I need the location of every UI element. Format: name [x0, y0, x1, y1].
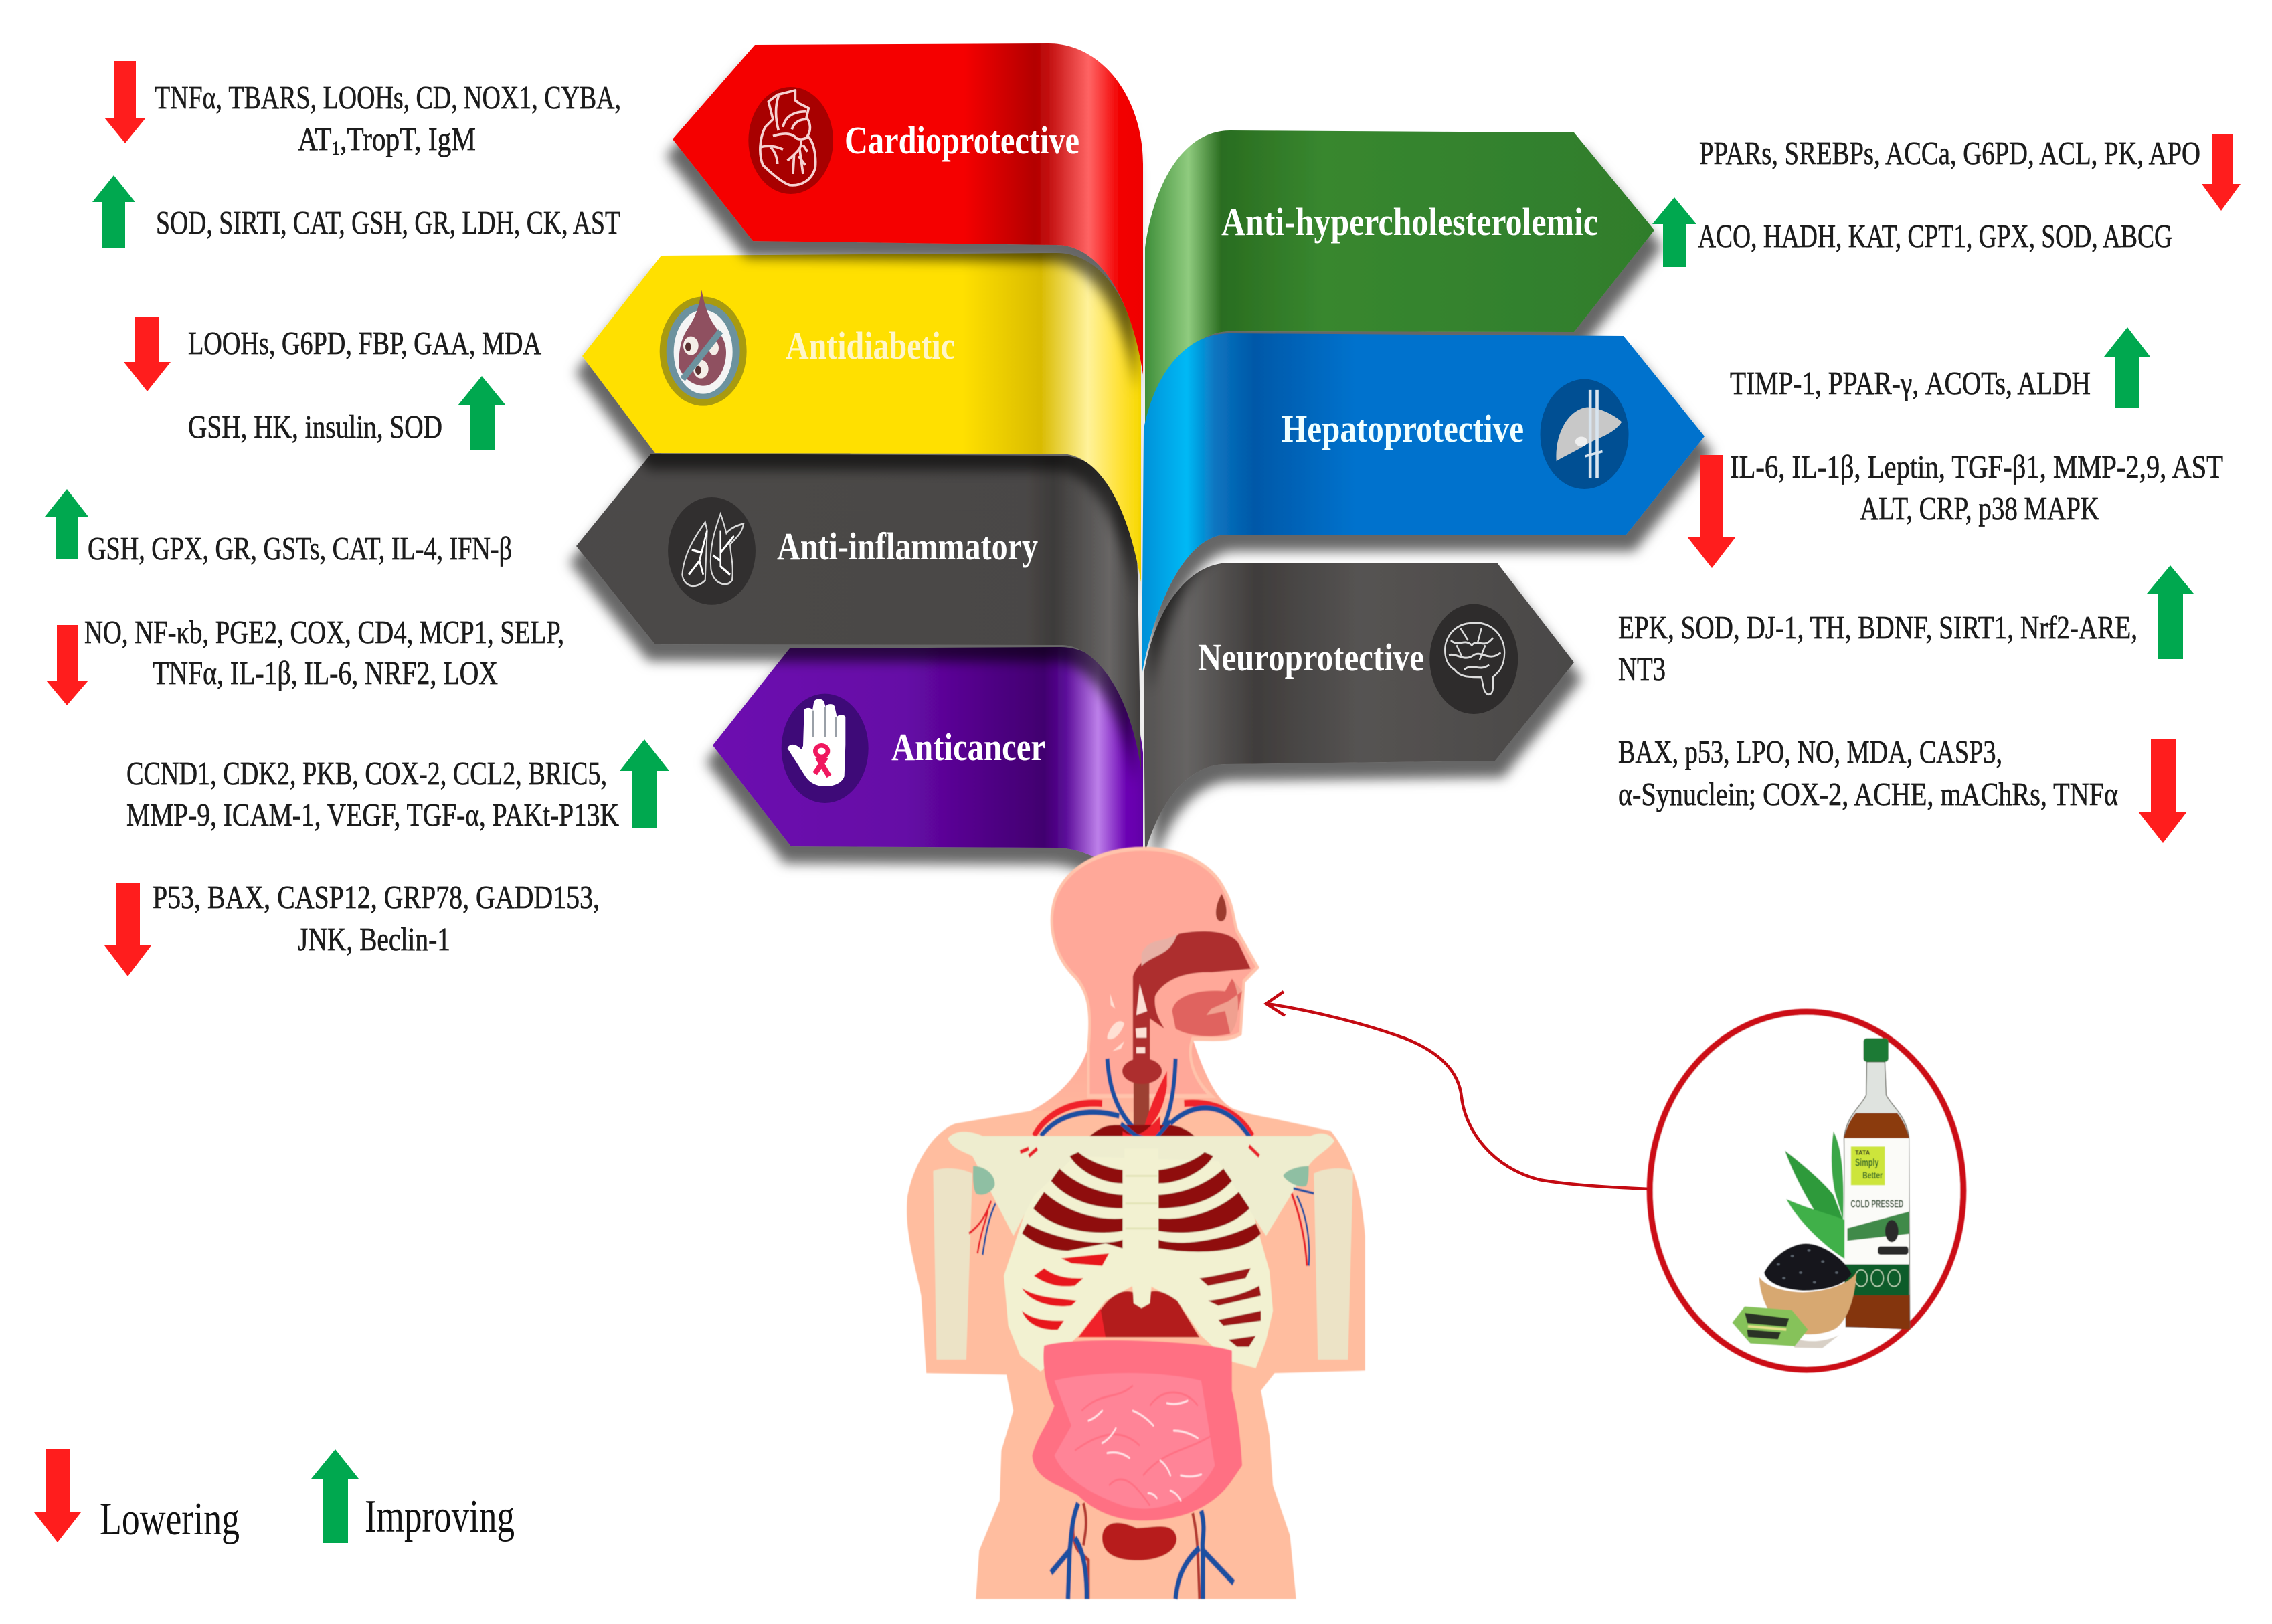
arrow: improving [2104, 327, 2150, 408]
text: neuroprotective lowered markers [1618, 733, 2187, 843]
arrow: improving [45, 489, 88, 559]
text: anti-inflammatory lowered markers [46, 614, 564, 705]
thyroid and trachea [1134, 1061, 1149, 1136]
icon: lungs and leaf [668, 497, 756, 605]
bladder [1102, 1523, 1176, 1560]
lower ribs gaps right [1199, 1268, 1261, 1347]
panel: Anti-inflammatory banner [576, 454, 1141, 770]
panel: Antidiabetic banner [582, 253, 1141, 582]
arrow: improving [458, 376, 506, 450]
icon: liver [1541, 379, 1629, 489]
text: anti-hypercholesterolemic improved markers [1652, 197, 2172, 267]
text: hepatoprotective lowered markers [1687, 448, 2223, 568]
text: anticancer lowered markers [104, 879, 600, 976]
seed pod [1732, 1306, 1808, 1346]
arrow: improving [620, 739, 669, 828]
body silhouette [907, 1026, 1365, 1599]
text: anticancer lowered markers: JNK, Beclin-1 [298, 921, 450, 958]
text: cardioprotective improved markers [92, 175, 620, 248]
shoulder blades and clavicles [948, 1132, 1334, 1236]
arrow: improving [92, 175, 135, 248]
text: neuroprotective improved markers: EPK, SOD, DJ-1, TH, BDNF, SIRT1, Nrf2-ARE, [1618, 609, 2137, 646]
text: anti-inflammatory lowered markers: NO, NF-κb, PGE2, COX, CD4, MCP1, SELP, [84, 614, 564, 650]
arrow: lowering [104, 883, 151, 976]
leg vessels [1073, 1503, 1089, 1599]
panel: Cardioprotective banner: Cardioprotective [845, 118, 1079, 162]
text: hepatoprotective lowered markers: ALT, CRP, p38 MAPK [1860, 490, 2099, 527]
arrow: lowering [124, 317, 171, 391]
legend: lowering [34, 1449, 240, 1545]
lower ribs gaps left [1022, 1253, 1109, 1330]
text: anticancer improved markers: CCND1, CDK2, PKB, COX-2, CCL2, BRIC5, [126, 755, 607, 792]
heart and liver [1078, 1291, 1199, 1337]
text: anticancer improved markers: MMP-9, ICAM-1, VEGF, TGF-α, PAKt-P13K [126, 796, 619, 833]
text: anti-inflammatory improved markers: GSH, GPX, GR, GSTs, CAT, IL-4, IFN-β [88, 530, 512, 567]
panel: Cardioprotective banner [673, 43, 1143, 375]
text: neuroprotective lowered markers: α-Synuclein; COX-2, ACHE, mAChRs, TNFα [1618, 776, 2118, 812]
panel: Antidiabetic banner: Antidiabetic [786, 324, 955, 367]
red circle [1650, 1012, 1963, 1370]
text: hepatoprotective improved markers: TIMP-1, PPAR-γ, ACOTs, ALDH [1730, 365, 2091, 401]
panel: Anti-hypercholesterolemic banner [1145, 130, 1654, 428]
arm vessels [969, 1201, 991, 1253]
head [1052, 849, 1257, 1096]
arrow: lowering [2138, 739, 2187, 843]
text: neuroprotective lowered markers: BAX, p53, LPO, NO, MDA, CASP3, [1618, 733, 2002, 770]
illustration: oil bottle and seeds in red circle: TATA [1855, 1149, 1870, 1156]
icon: hand with ribbon [782, 694, 869, 803]
bottle [1844, 1062, 1910, 1328]
text: antidiabetic lowered markers: LOOHs, G6PD, FBP, GAA, MDA [188, 325, 541, 361]
text: hepatoprotective improved markers [1730, 327, 2150, 408]
text: anticancer lowered markers: P53, BAX, CASP12, GRP78, GADD153, [153, 879, 600, 915]
text: anti-inflammatory lowered markers: TNFα, IL-1β, IL-6, NRF2, LOX [153, 654, 498, 691]
legend: lowering: Lowering [100, 1494, 240, 1545]
black seeds [1764, 1243, 1852, 1291]
text: cardioprotective lowered markers: ,TropT, IgM [340, 120, 476, 157]
illustration: oil bottle and seeds in red circle: Simply [1855, 1157, 1878, 1168]
bowl [1759, 1273, 1856, 1334]
illustration: oil bottle and seeds in red circle [1650, 1012, 1963, 1370]
cervical vertebrae and glands [1136, 984, 1147, 1053]
arrow: improving [2147, 565, 2194, 659]
leaves [1785, 1150, 1843, 1220]
illustration: human body anatomy [907, 849, 1365, 1599]
panel: Neuroprotective banner [1144, 563, 1574, 853]
lung bands right [1158, 1152, 1261, 1252]
legend: improving: Improving [365, 1491, 515, 1542]
upper chest organs [1085, 1125, 1198, 1140]
panel: Hepatoprotective banner: Hepatoprotective [1282, 407, 1524, 450]
legend: improving [311, 1449, 515, 1543]
text: cardioprotective lowered markers: TNFα, TBARS, LOOHs, CD, NOX1, CYBA, [155, 79, 621, 116]
arm bones [933, 1168, 1353, 1360]
arrow: lowering [2202, 134, 2241, 211]
mouth [1172, 979, 1242, 1036]
nasal cavity and throat [1133, 931, 1251, 1061]
arrow: lowering [46, 625, 88, 705]
text: neuroprotective improved markers: NT3 [1618, 650, 1666, 687]
panel: Anti-inflammatory banner: Anti-inflammatory [777, 525, 1038, 568]
icon: heart outline [748, 87, 833, 194]
text: cardioprotective lowered markers: AT [298, 120, 338, 157]
eye [1216, 894, 1227, 921]
text: cardioprotective lowered markers: 1 [331, 137, 340, 159]
text: anticancer improved markers [126, 739, 669, 833]
text: anti-hypercholesterolemic lowered markers [1699, 134, 2241, 211]
rib cage [1004, 1144, 1273, 1372]
text: antidiabetic improved markers: GSH, HK, insulin, SOD [188, 408, 442, 445]
sternum [1124, 1148, 1158, 1308]
arrow: lowering [104, 61, 146, 143]
illustration: oil bottle and seeds in red circle: COLD PRESSED [1850, 1198, 1903, 1210]
text: anti-inflammatory improved markers [45, 489, 512, 567]
text: antidiabetic lowered markers [124, 317, 541, 391]
cartilage joints [973, 1166, 1309, 1195]
arrow: lowering [1687, 455, 1736, 568]
icon: blood drop with slash [660, 290, 747, 406]
panel: Neuroprotective banner: Neuroprotective [1198, 636, 1424, 679]
arrow: improving [1652, 197, 1696, 267]
panel: Anticancer banner [713, 647, 1143, 865]
panel: Anticancer banner: Anticancer [891, 725, 1045, 769]
blood vessels of the neck and shoulders [1034, 1103, 1252, 1136]
intestines [1032, 1340, 1242, 1520]
text: antidiabetic improved markers [188, 376, 506, 450]
illustration: oil bottle and seeds in red circle: Better [1862, 1170, 1883, 1180]
text: cardioprotective lowered markers [104, 61, 621, 159]
arrow: curved line from oil to mouth [1266, 992, 1650, 1189]
panel: Anti-hypercholesterolemic banner: Anti-hypercholesterolemic [1221, 200, 1598, 244]
icon: brain [1429, 604, 1518, 714]
lung bands left [1022, 1152, 1123, 1251]
text: cardioprotective improved markers: SOD, SIRTI, CAT, GSH, GR, LDH, CK, AST [156, 204, 620, 241]
panel: Hepatoprotective banner [1142, 333, 1705, 676]
text: neuroprotective improved markers [1618, 565, 2194, 687]
